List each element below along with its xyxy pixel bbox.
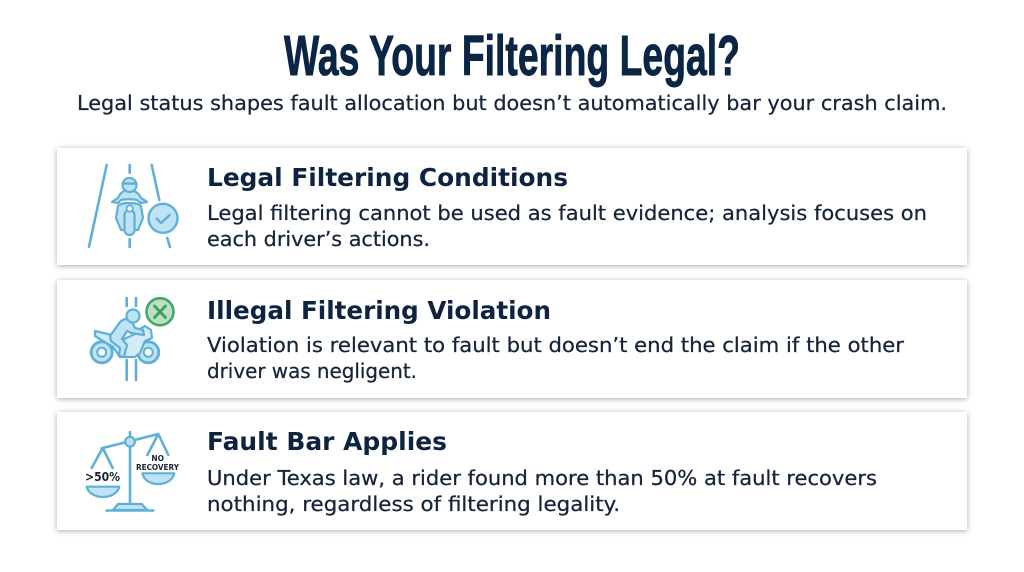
body text: nothing, regardless of filtering legality. <box>207 492 620 516</box>
body text: driver was negligent. <box>207 359 417 383</box>
subtitle: Legal status shapes fault allocation but doesn’t automatically bar your crash claim. <box>77 91 947 115</box>
heading: Legal Filtering Conditions <box>207 163 568 192</box>
panel: fault bar applies <box>57 412 967 530</box>
icon: balance scale: RECOVERY <box>136 463 180 472</box>
icon: balance scale: >50% <box>85 469 120 484</box>
heading: Illegal Filtering Violation <box>207 296 551 325</box>
icon: motorcycle in lane with check mark <box>89 165 178 247</box>
icon: balance scale: NO <box>151 454 164 463</box>
body text: Violation is relevant to fault but doesn’t end the claim if the other <box>207 333 905 357</box>
body text: each driver’s actions. <box>207 227 430 251</box>
body text <box>207 333 905 383</box>
panel: legal filtering conditions <box>57 148 967 265</box>
body text <box>207 201 927 251</box>
panel: illegal filtering violation <box>57 280 967 398</box>
title: Was Your Filtering Legal? <box>284 24 740 88</box>
body text: Legal filtering cannot be used as fault evidence; analysis focuses on <box>207 201 927 225</box>
icon: balance scale <box>85 432 180 510</box>
icon: motorcycle side view with x mark <box>91 298 174 380</box>
body text <box>207 466 877 516</box>
heading: Fault Bar Applies <box>207 427 447 456</box>
body text: Under Texas law, a rider found more than 50% at fault recovers <box>207 466 877 490</box>
